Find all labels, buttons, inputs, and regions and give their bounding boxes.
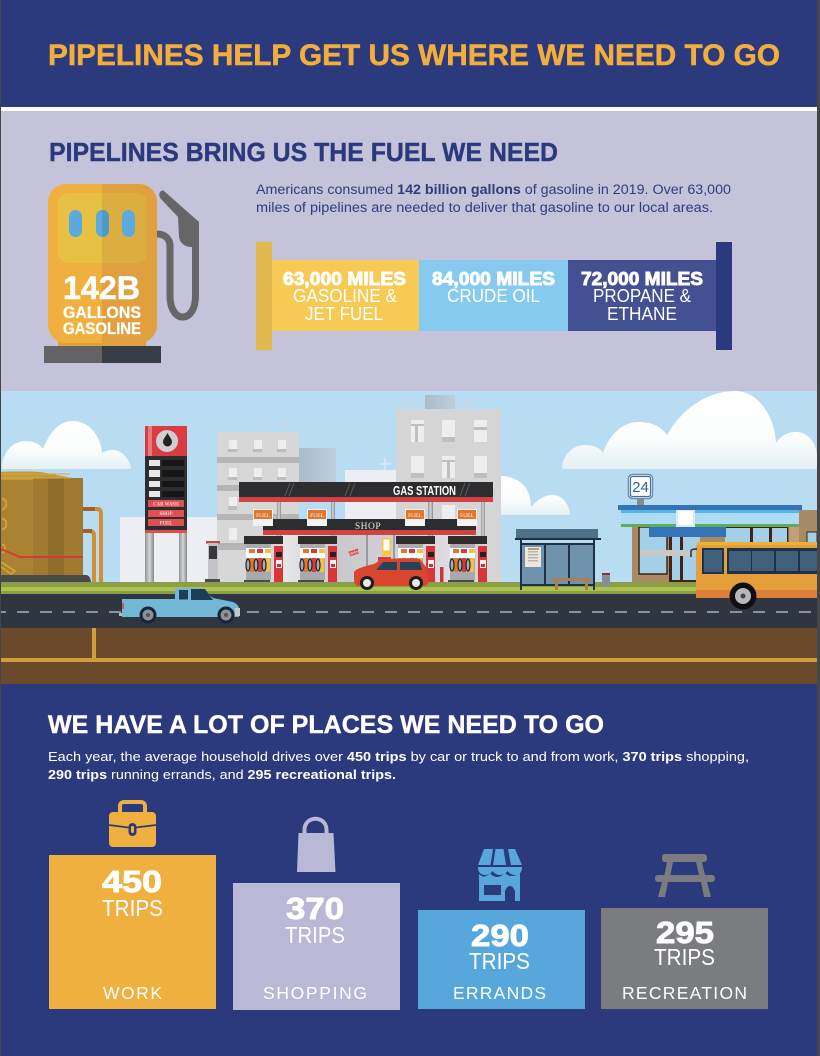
icon: gas pump 142B gallons gasoline: GASOLINE (63, 320, 141, 338)
panel: fuel (0, 111, 820, 391)
background white building centre (345, 458, 415, 530)
pipeline bar chart (256, 242, 732, 350)
storage tank (0, 472, 101, 582)
segment: gasoline and jet fuel: GASOLINE & (293, 286, 397, 306)
icon: storefront (478, 849, 522, 901)
building left (217, 421, 299, 582)
sign 24: 24 (632, 479, 649, 496)
price sign: CAR WASH (153, 502, 179, 508)
segment: propane and ethane: 72,000 MILES (581, 269, 703, 289)
fire extinguisher (440, 567, 444, 582)
bar: work (49, 855, 216, 1009)
red car (354, 558, 429, 590)
segment: gasoline and jet fuel: JET FUEL (305, 304, 383, 324)
bar: errands: ERRANDS (453, 983, 546, 1003)
panel: gas station street scene (0, 391, 820, 684)
bar: work: WORK (103, 983, 162, 1003)
icon: gas pump 142B gallons gasoline: GALLONS (63, 304, 141, 322)
background white building (120, 517, 230, 582)
window poster (378, 538, 391, 565)
bar: work: 450 (102, 864, 162, 899)
text block: gasoline consumption: miles of pipelines are needed to deliver that gasoline to our local areas. (256, 200, 713, 215)
grass (0, 582, 820, 594)
pump islands (244, 536, 487, 582)
cloud middle (500, 476, 570, 515)
segment: gasoline and jet fuel: 63,000 MILES (283, 269, 406, 289)
small fuel pump (205, 541, 220, 582)
price sign: SHOP (159, 512, 173, 517)
bus shelter (515, 529, 610, 590)
bar: recreation: RECREATION (622, 983, 747, 1003)
icon: shopping bag (297, 819, 336, 872)
segment: propane and ethane: ETHANE (607, 304, 677, 324)
gas station (239, 482, 493, 582)
orange bus (691, 542, 817, 610)
sign 24 (628, 474, 652, 505)
segment: propane and ethane: PROPANE & (593, 286, 691, 306)
segment: crude oil: 84,000 MILES (432, 269, 555, 289)
bar: recreation: 295 (656, 915, 714, 950)
fuel signs: FUEL (256, 513, 271, 519)
cloud right (562, 391, 820, 469)
text block: gasoline consumption: Americans consumed 142 billion gallons of gasoline in 2019. Over 63,000 (256, 182, 731, 197)
fuel signs: FUEL (408, 513, 423, 519)
convenience store (618, 474, 817, 582)
panel: trips section (0, 684, 820, 1056)
price sign: FUEL (160, 522, 172, 526)
icon: picnic table (655, 854, 715, 897)
building right (396, 395, 501, 582)
bar: errands: 290 (471, 918, 529, 953)
heading: places: WE HAVE A LOT OF PLACES WE NEED TO GO (48, 711, 604, 739)
icon: gas pump 142B gallons gasoline: 142B (63, 270, 140, 306)
text block: household trips: Each year, the average household drives over 450 trips by car or truck to and from work, 370 trips shopping, (48, 749, 749, 764)
shop fascia (263, 519, 476, 535)
fuel signs: FUEL (460, 513, 475, 519)
canopy: GAS STATION (393, 484, 456, 498)
text block: household trips: 290 trips running errands, and 295 recreational trips. (48, 767, 396, 782)
icon: gas pump 142B gallons gasoline (44, 184, 199, 363)
bar: recreation: TRIPS (654, 944, 715, 970)
text block: gasoline consumption (256, 182, 731, 215)
segment: propane and ethane (568, 260, 716, 331)
segment: crude oil (419, 260, 568, 331)
canopy (239, 482, 493, 502)
bar: shopping (233, 883, 400, 1010)
road (0, 594, 820, 628)
bar: recreation (601, 908, 768, 1009)
blue pickup truck (119, 588, 240, 624)
text block: household trips (48, 749, 749, 782)
price sign (145, 426, 187, 582)
bar: shopping: TRIPS (285, 922, 345, 948)
shop fascia: SHOP (355, 522, 381, 532)
open tag: OPEN (348, 550, 360, 557)
underground soil and pipeline (0, 628, 820, 684)
fuel signs: FUEL (310, 513, 325, 519)
bar: errands: TRIPS (469, 948, 530, 974)
cloud left (2, 421, 131, 469)
icon: briefcase (109, 802, 156, 847)
heading: fuel: PIPELINES BRING US THE FUEL WE NEED (49, 137, 558, 167)
segment: gasoline and jet fuel (272, 260, 419, 331)
bar: work: TRIPS (102, 895, 163, 921)
segment: crude oil: CRUDE OIL (447, 286, 540, 306)
bar: shopping: SHOPPING (263, 983, 367, 1003)
title: PIPELINES HELP GET US WHERE WE NEED TO GO (48, 39, 780, 72)
background blue building (299, 448, 336, 498)
fuel signs (253, 509, 477, 526)
bar: shopping: 370 (286, 891, 344, 926)
header band (0, 0, 820, 107)
bar: errands (418, 910, 585, 1009)
